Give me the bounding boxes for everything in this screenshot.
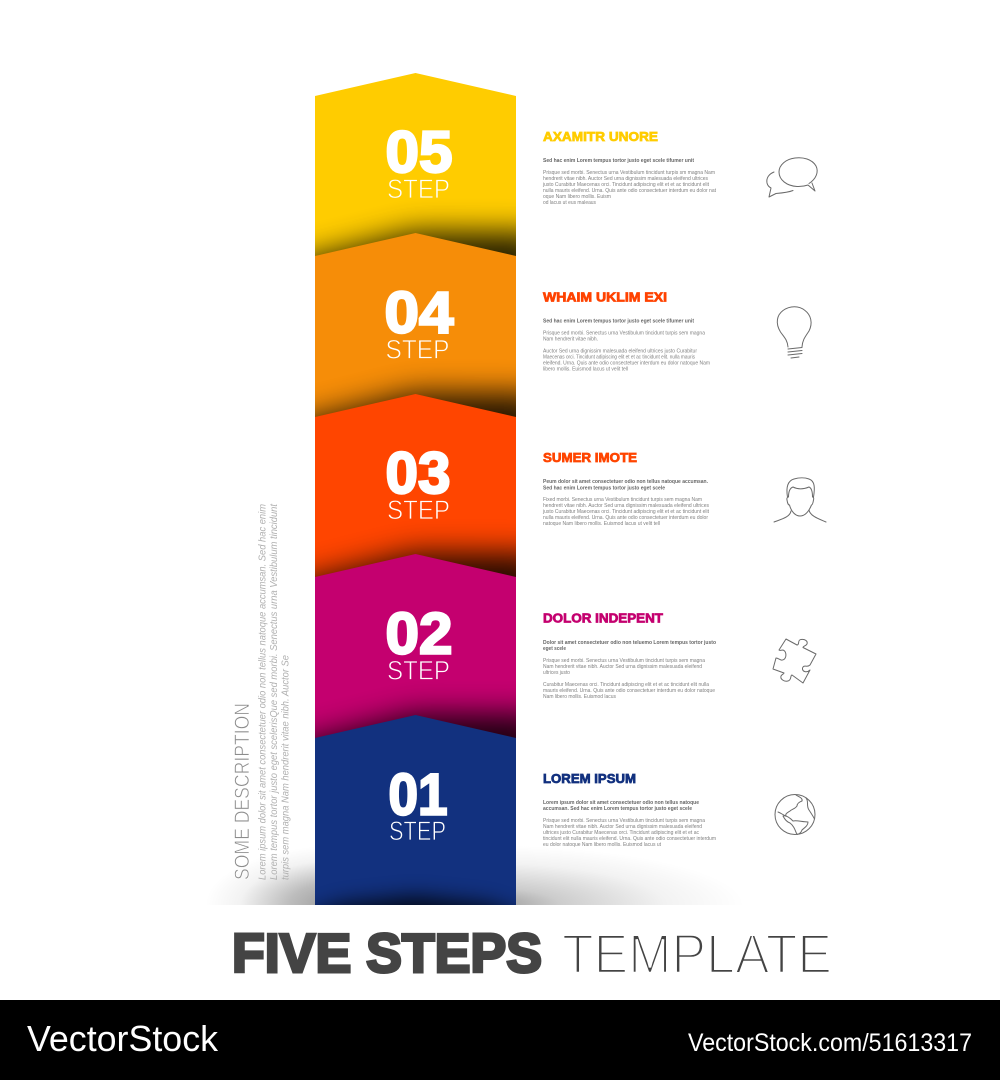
icon: puzzle piece bbox=[773, 639, 816, 683]
step 03 number: 03 bbox=[386, 441, 450, 506]
vertical description text bbox=[256, 503, 292, 880]
text block: step 02: Dolor sit amet consectetuer odio non teluemo Lorem tempus tortor justo bbox=[543, 640, 717, 646]
text block: step 02 bbox=[543, 610, 717, 700]
step 01 number: STEP bbox=[389, 816, 446, 846]
text block: step 03: justo Curabitur Maecenas orci. Tincidunt adipiscing elit et et ac tincidunt elit bbox=[542, 509, 709, 515]
text block: step 03: Peum dolor sit amet consectetuer odio non tellus natoque accumsan. bbox=[543, 479, 708, 485]
text block: step 02: Nam libero mollis. Euismod lacus bbox=[543, 694, 616, 700]
text block: step 02: Curabitur Maecenas orci. Tincidunt adipiscing elit et et ac tincidunt elit nulla bbox=[543, 682, 709, 688]
text block: step 02: ultrices justo bbox=[543, 670, 570, 676]
text block: step 05: Sed hac enim Lorem tempus tortor justo eget scele tifumer unit bbox=[543, 158, 694, 164]
text block: step 01: eu dolor natoque Nam libero mollis. Euismod lacus ut bbox=[543, 842, 661, 848]
ground shadow bbox=[205, 845, 745, 905]
footer bar bbox=[0, 1000, 1000, 1080]
text block: step 01: tincidunt elit nulla mauris eleifend. Urna. Quis ante odio consectetuer interdum bbox=[543, 836, 716, 842]
step 04 number: STEP bbox=[386, 334, 450, 364]
text block: step 05: Prisque sed morbi. Senectus urna Vestibulum tincidunt turpis sm magna Nam bbox=[543, 170, 715, 176]
text block: step 04: Auctor Sed urna dignissim malesuada eleifend ultrices justo Curabitur bbox=[543, 349, 697, 355]
text block: step 03: nulla mauris eleifend. Urna. Quis ante odio consectetuer interdum eu dolor bbox=[543, 515, 708, 521]
icon: person head bbox=[774, 478, 826, 522]
vertical description text: Lorem tempus tortor justo eget scelerisQue sed morbi. Senectus urna Vestibulum tincidunt bbox=[268, 503, 280, 880]
text block: step 01: Nam hendrerit vitae nibh. Auctor Sed urna dignissim malesuada eleifend bbox=[543, 824, 702, 830]
text block: step 01: LOREM IPSUM bbox=[543, 771, 636, 786]
text block: step 03 bbox=[542, 450, 709, 527]
text block: step 02: DOLOR INDEPENT bbox=[543, 610, 663, 626]
icon: speech bubbles bbox=[767, 158, 817, 197]
title: FIVE STEPS bbox=[232, 922, 542, 984]
step 02 number: STEP bbox=[387, 656, 450, 686]
panel: step 04 chevron bbox=[315, 233, 516, 417]
text block: step 04: WHAIM UKLIM EXI bbox=[543, 290, 667, 304]
text block: step 05: oque Nam libero mollis. Euism bbox=[543, 194, 611, 200]
text block: step 01 bbox=[543, 771, 716, 848]
text block: step 01: Lorem ipsum dolor sit amet consectetuer odio non tellus natoque bbox=[543, 800, 699, 806]
text block: step 04: eleifend. Urna. Quis ante odio consectetuer interdum eu dolor natoque Nam bbox=[543, 361, 710, 367]
vertical heading: some description: SOME DESCRIPTION bbox=[231, 703, 254, 880]
text block: step 05: justo Curabitur Maecenas orci. Tincidunt adipiscing elit et et ac tincidunt elit bbox=[542, 182, 709, 188]
step 05 number: STEP bbox=[387, 174, 450, 204]
panel: step 01 chevron bbox=[315, 715, 516, 905]
text block: step 03: Fixed morbi. Senectus urna Vestibulum tincidunt turpis sem magna Nam bbox=[543, 497, 702, 503]
text block: step 04 bbox=[543, 290, 710, 373]
text block: step 01: accumsan. Sed hac enim Lorem tempus tortor justo eget scele bbox=[543, 806, 692, 812]
text block: step 02: mauris eleifend. Urna. Quis ante odio consectetuer interdum eu dolor natoque bbox=[543, 688, 715, 694]
text block: step 03: hendrerit vitae nibh. Auctor Sed urna dignissim malesuada eleifend ultrices bbox=[543, 503, 709, 509]
text block: step 03: natoque Nam libero mollis. Euismod lacus ut velit tell bbox=[543, 521, 660, 527]
text block: step 02: Prisque sed morbi. Senectus urna Vestibulum tincidunt turpis sem magna bbox=[543, 658, 705, 664]
text block: step 05: nulla mauris eleifend. Urna. Quis ante odio consectetuer interdum eu dolor nat bbox=[543, 188, 716, 194]
step 04 number: 04 bbox=[384, 280, 454, 346]
text block: step 04: libero mollis. Euismod lacus ut velit tell bbox=[543, 367, 628, 373]
icon: light bulb bbox=[777, 307, 811, 358]
text block: step 01: Prisque sed morbi. Senectus urna Vestibulum tincidunt turpis sem magna bbox=[543, 818, 705, 824]
text block: step 05: AXAMITR UNORE bbox=[543, 129, 658, 144]
footer logo: VectorStock bbox=[27, 1018, 219, 1059]
vertical description text: Lorem ipsum dolor sit amet consectetuer odio non tellus natoque accumsan. Sed hac enim bbox=[256, 504, 268, 880]
step 03 number: STEP bbox=[387, 495, 450, 525]
title bbox=[232, 922, 832, 985]
text block: step 01: ultrices justo Curabitur Maecenas orci. Tincidunt adipiscing elit et et ac bbox=[543, 830, 699, 836]
text block: step 04: Prisque sed morbi. Senectus urna Vestibulum tincidunt turpis sem magna bbox=[543, 331, 705, 337]
text block: step 02: eget scele bbox=[543, 646, 566, 652]
icon: globe bbox=[775, 794, 815, 834]
text block: step 03: SUMER IMOTE bbox=[543, 450, 637, 465]
title: TEMPLATE bbox=[562, 922, 832, 985]
panel: step 05 chevron bbox=[315, 73, 516, 256]
text block: step 05: hendrerit vitae nibh. Auctor Sed urna dignissim malesuada eleifend ultrices bbox=[543, 176, 708, 182]
step 02 number: 02 bbox=[386, 602, 452, 666]
text block: step 04: Sed hac enim Lorem tempus tortor justo eget scele tifumer unit bbox=[543, 319, 694, 325]
text block: step 05 bbox=[542, 129, 716, 206]
vertical description text: turpis sem magna Nam hendrerit vitae nibh. Auctor Se bbox=[280, 655, 292, 880]
text block: step 04: Nam hendrerit vitae nibh. bbox=[543, 337, 598, 343]
text block: step 05: od lacus ut eus maleaus bbox=[543, 200, 596, 206]
text block: step 03: Sed hac enim Lorem tempus tortor justo eget scele bbox=[543, 485, 665, 491]
text block: step 04: Maecenas orci. Tincidunt adipiscing elit et et ac tincidunt elit. nulla mauris bbox=[543, 355, 695, 361]
step 05 number: 05 bbox=[386, 120, 452, 185]
footer url: VectorStock.com/51613317 bbox=[688, 1029, 972, 1057]
panel: step 03 chevron bbox=[315, 394, 516, 577]
text block: step 02: Nam hendrerit vitae nibh. Auctor Sed urna dignissim malesuada eleifend bbox=[543, 664, 702, 670]
step 01 number: 01 bbox=[388, 762, 448, 828]
panel: step 02 chevron bbox=[315, 554, 516, 738]
